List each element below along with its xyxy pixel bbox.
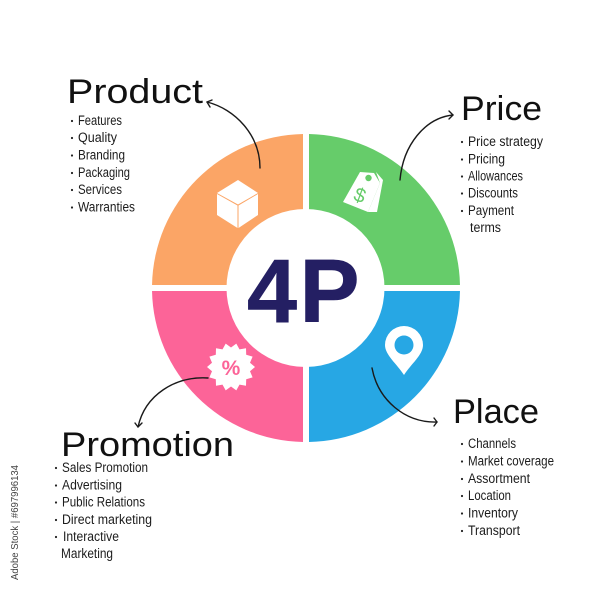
list: product items: Quality bbox=[78, 130, 117, 145]
icon: location pin bbox=[385, 326, 423, 375]
center label 4P: P bbox=[300, 242, 360, 342]
list: product items bbox=[71, 113, 135, 214]
list: place items: Inventory bbox=[468, 506, 518, 520]
center label 4P: 4 bbox=[247, 242, 297, 342]
arrow: place bbox=[372, 368, 437, 426]
arrow: promotion bbox=[135, 378, 208, 427]
list: price items: Discounts bbox=[468, 186, 518, 200]
icon: price tags bbox=[343, 172, 383, 212]
list: price items: Pricing bbox=[468, 152, 505, 166]
segment: place blue bbox=[309, 291, 460, 442]
list: price items: Allowances bbox=[468, 168, 523, 184]
list: place items bbox=[461, 436, 554, 538]
arrow: price bbox=[400, 111, 453, 180]
text block: product bbox=[67, 73, 204, 214]
heading: price: Price bbox=[461, 90, 542, 128]
list: place items: Market coverage bbox=[468, 454, 554, 468]
list: place items: Location bbox=[468, 488, 511, 503]
list: place items: Assortment bbox=[468, 471, 530, 486]
list: promotion items: Sales Promotion bbox=[62, 460, 148, 475]
arrow: product bbox=[207, 100, 260, 168]
sidebar text: stock id: Adobe Stock | #697996134 bbox=[10, 465, 21, 580]
text block: promotion bbox=[55, 426, 234, 561]
list: promotion items: Advertising bbox=[62, 478, 122, 492]
list: promotion items: Marketing bbox=[61, 546, 113, 561]
list: promotion items bbox=[55, 460, 152, 561]
segment: product orange bbox=[152, 134, 303, 285]
heading: promotion: Promotion bbox=[61, 426, 234, 464]
icon: discount badge bbox=[207, 344, 255, 390]
list: product items: Services bbox=[78, 182, 122, 197]
list: price items: Payment bbox=[468, 203, 514, 218]
heading: place: Place bbox=[453, 393, 539, 431]
center circle bbox=[226, 209, 384, 367]
text block: price bbox=[461, 90, 543, 235]
list: product items: Warranties bbox=[78, 200, 135, 214]
icon: price tags: $ bbox=[351, 184, 369, 208]
list: price items: Price strategy bbox=[468, 134, 543, 149]
segment: price green bbox=[309, 134, 460, 285]
panel: 4P ring diagram bbox=[152, 134, 460, 442]
list: product items: Branding bbox=[78, 148, 125, 162]
icon: discount badge: % bbox=[222, 357, 241, 380]
list: place items: Channels bbox=[468, 436, 516, 451]
icon: product box bbox=[217, 180, 258, 228]
list: price items bbox=[461, 134, 543, 235]
list: promotion items: Direct marketing bbox=[62, 512, 152, 527]
list: price items: terms bbox=[470, 220, 501, 235]
segment: promotion pink bbox=[152, 291, 303, 442]
list: promotion items: Public Relations bbox=[62, 494, 145, 510]
heading: product: Product bbox=[67, 73, 204, 111]
text block: place bbox=[453, 393, 554, 538]
list: place items: Transport bbox=[468, 523, 520, 538]
list: product items: Features bbox=[78, 113, 122, 128]
list: promotion items: Interactive bbox=[63, 529, 119, 544]
list: product items: Packaging bbox=[78, 165, 130, 180]
